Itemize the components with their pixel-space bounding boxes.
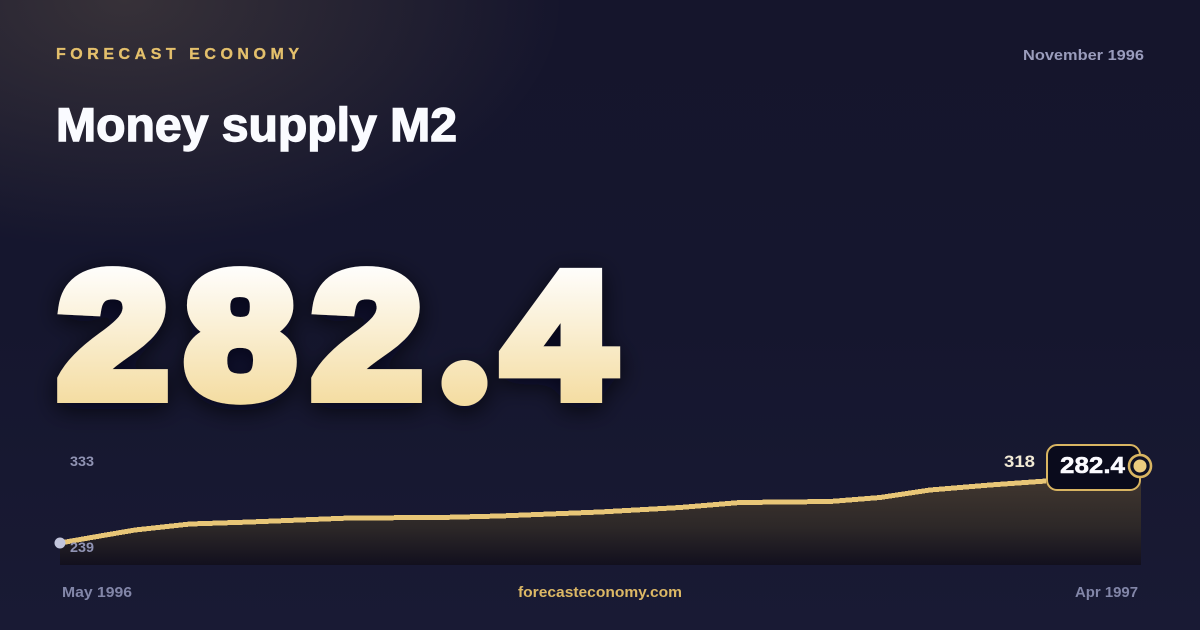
current point marker [1129,455,1151,477]
chart area fill [60,478,1141,565]
big value: . [440,237,489,433]
area chart [54,478,1141,565]
start date: May 1996 [62,584,132,601]
peak label: 318 [1004,452,1035,471]
chart line [60,481,1046,543]
axis max: 333 [70,453,94,469]
badge value: 282.4 [1060,452,1125,478]
big value: 4 [504,237,613,434]
decimal point [442,360,488,406]
website: forecasteconomy.com [518,584,682,601]
current value badge [1047,445,1151,490]
end date: Apr 1997 [1075,584,1138,601]
date: November 1996 [1023,47,1144,64]
axis min: 239 [70,539,94,555]
eyebrow: brand: FORECAST ECONOMY [56,46,299,63]
big value: 282 [58,237,422,434]
big value [58,237,613,434]
start point [54,538,66,548]
title: Money supply M2 [56,98,457,151]
